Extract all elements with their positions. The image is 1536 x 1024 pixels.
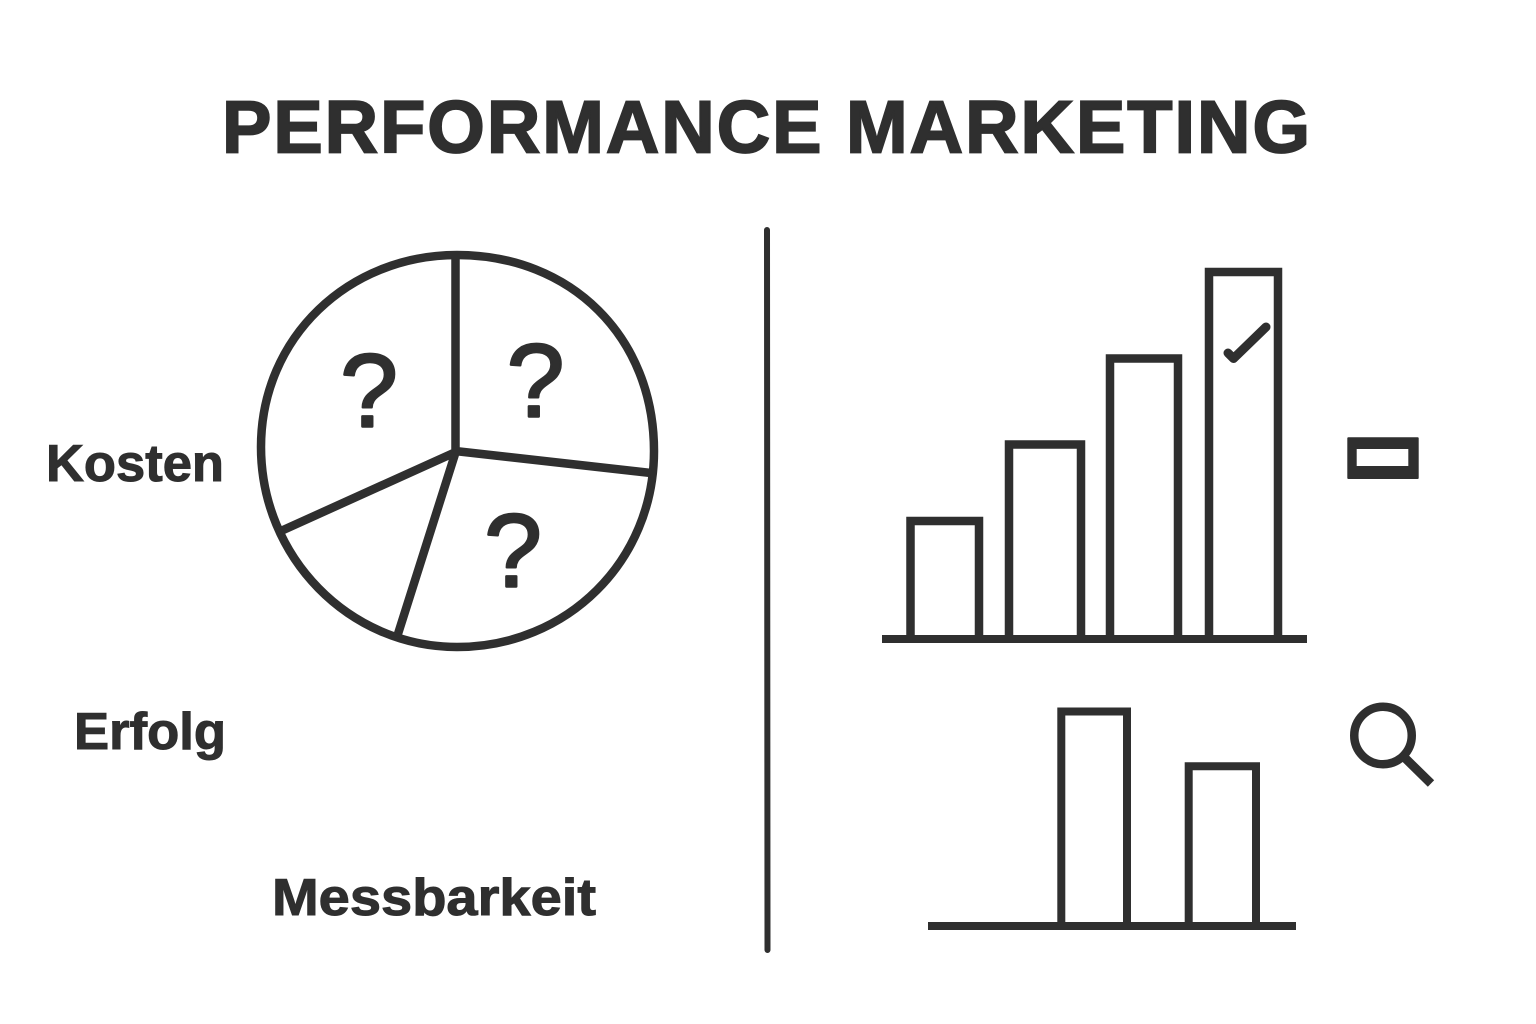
icon: magnifying glass	[1354, 707, 1431, 784]
question mark 2: ?	[507, 324, 564, 440]
icon: check mark	[1228, 327, 1266, 358]
question mark 1: ?	[340, 334, 398, 450]
pie chart	[261, 255, 654, 647]
lower bar chart	[928, 712, 1296, 926]
question mark 3: ?	[484, 494, 542, 610]
icon: rectangle	[1347, 437, 1419, 479]
label: Messbarkeit: Messbarkeit	[272, 869, 596, 927]
label: Erfolg: Erfolg	[74, 703, 226, 761]
title: PERFORMANCE MARKETING	[222, 86, 1310, 168]
upper bar chart	[882, 272, 1307, 639]
vertical divider	[764, 230, 770, 950]
label: Kosten: Kosten	[46, 435, 224, 493]
